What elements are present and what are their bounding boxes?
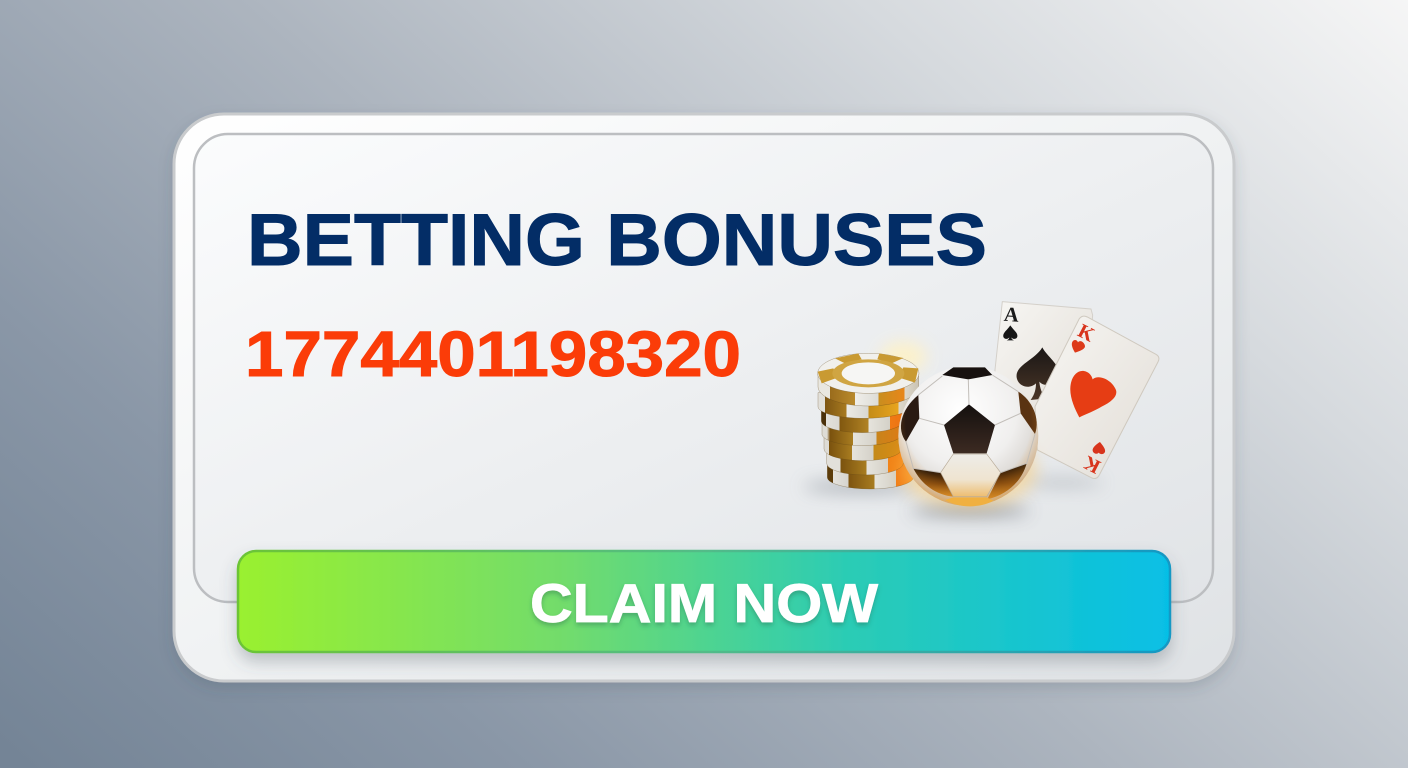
- bonus number: 1774401198320: [245, 318, 741, 390]
- small inverted heart: [1093, 442, 1105, 454]
- icon: soccer ball: [898, 366, 1038, 508]
- large heart: [1070, 371, 1116, 417]
- icon: king of hearts card: [1035, 316, 1159, 479]
- ball rim glow: [898, 366, 1038, 506]
- button label: CLAIM NOW: [530, 572, 878, 634]
- heading: betting bonuses: BETTING BONUSES: [247, 200, 987, 281]
- panel seams: [906, 375, 1035, 473]
- small spade: [1003, 325, 1017, 340]
- center pentagon: [944, 404, 995, 453]
- king letter: K: [1074, 320, 1098, 347]
- panel: inner frame: [194, 134, 1213, 602]
- bottom hexagon: [941, 454, 1001, 497]
- chip top face: [818, 353, 919, 393]
- large spade: [1017, 347, 1059, 400]
- panel: outer card: [174, 114, 1234, 681]
- shadows under illustration: [803, 342, 1103, 515]
- dark side panels: [901, 395, 919, 442]
- icon: chip stack: [818, 353, 919, 489]
- button: claim now: [238, 551, 1170, 652]
- illustration: chips, ball, cards: [803, 302, 1159, 515]
- ace letter: A: [1003, 304, 1020, 327]
- icon: ace of spades card: [995, 302, 1093, 423]
- inverted king letter: K: [1080, 451, 1104, 478]
- small heart: [1072, 340, 1085, 353]
